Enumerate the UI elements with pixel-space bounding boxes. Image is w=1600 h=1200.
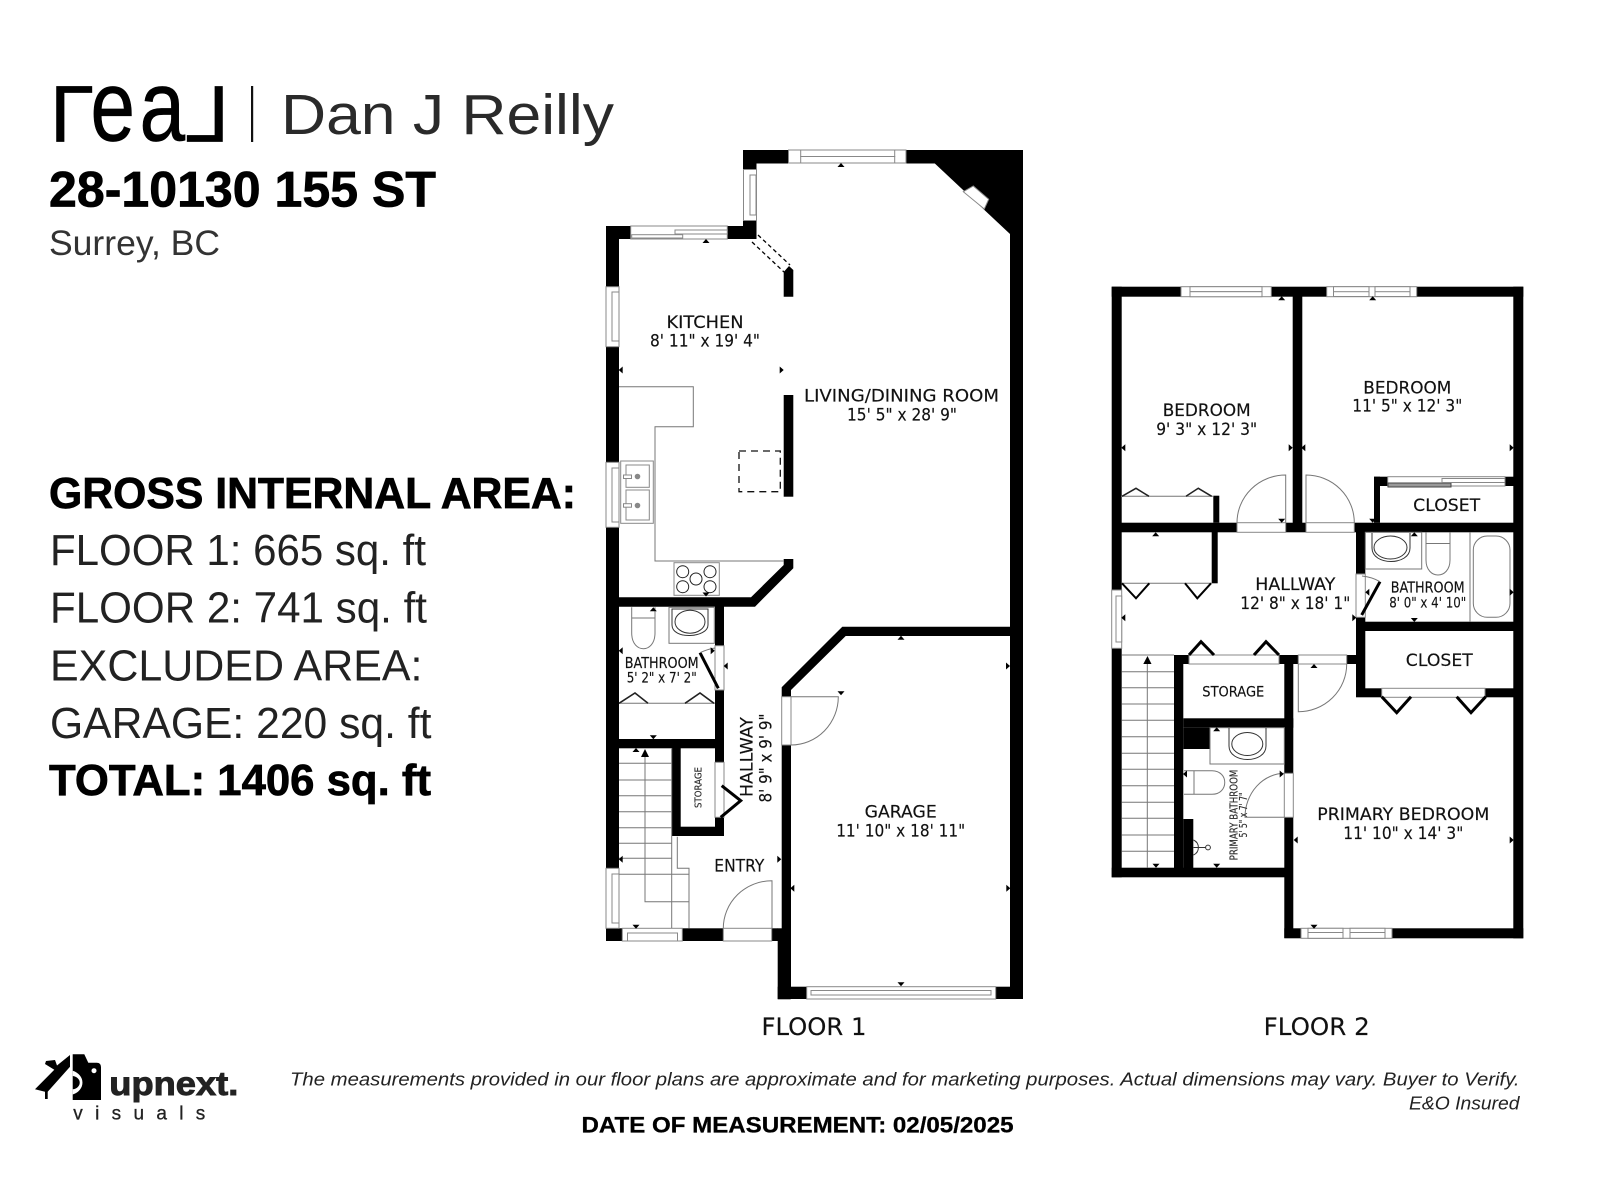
logo: real wordmark: Γ [50,70,94,159]
label: primary bathroom: PRIMARY BATHROOM [1228,770,1240,860]
street address: 28-10130 155 ST [49,162,436,218]
floor 2 measurement markers [1121,296,1514,929]
floor plan: floor 2 [1112,287,1523,1041]
logo: upnext visuals [35,1054,238,1124]
dims: bathroom: 5' 2" x 7' 2" [627,670,697,686]
wordmark: visuals: visuals [73,1103,205,1124]
dims: hallway: 8' 9" x 9' 9" [756,714,776,802]
city: Surrey, BC [49,224,220,263]
dims: second bedroom: 11' 5" x 12' 3" [1352,397,1462,417]
fireplace [963,186,989,209]
floor 2 room labels [1156,378,1489,860]
hall bathroom fixtures [1365,532,1510,622]
floor 1 windows and openings [606,150,996,999]
floor 2 walls [1112,287,1523,938]
floor plan: floor 1 [606,150,1023,1041]
logo: real wordmark: L [184,70,229,159]
kitchen glazed opening [752,235,790,272]
logo: real wordmark: a [140,51,185,162]
excluded area: EXCLUDED AREA: [50,642,422,690]
floor 1 walls [606,150,1023,999]
stove [674,563,719,595]
area summary [49,469,576,805]
dims: bathroom: 8' 0" x 4' 10" [1389,595,1466,611]
agent name: Dan J Reilly [281,83,615,147]
logo: real wordmark [50,51,229,163]
icon: house and camera mark [35,1054,101,1100]
separator [251,86,253,142]
disclaimer line: The measurements provided in our floor plans are approximate and for marketing purposes. Actual dimensions may vary. Buyer to Verify. [290,1070,1520,1090]
stairs [1122,655,1174,868]
wordmark: upnext.: upnext. [109,1065,238,1102]
label: lower closet: CLOSET [1406,651,1473,671]
kitchen counter [619,387,784,561]
label: bathroom: BATHROOM [625,654,699,672]
label: bathroom: BATHROOM [1391,579,1465,597]
stairs [619,748,689,928]
garage area: GARAGE: 220 sq. ft [50,699,432,748]
label: bedroom: BEDROOM [1163,401,1251,421]
dims: kitchen: 8' 11" x 19' 4" [650,332,760,352]
property address [49,162,436,263]
label: living/dining room: LIVING/DINING ROOM [804,387,999,407]
dims: primary bedroom: 11' 10" x 14' 3" [1343,824,1463,844]
dims: bedroom: 9' 3" x 12' 3" [1156,420,1257,440]
logo: real wordmark: e [90,51,135,163]
dims: primary bathroom: 5' 5" x 7' 7" [1238,792,1250,838]
label: storage: STORAGE [1202,685,1264,701]
floor 1 room labels [625,313,999,877]
primary bathroom fixtures [1184,728,1284,855]
kitchen island dashed outline [739,451,780,492]
label: hallway: HALLWAY [1255,575,1336,595]
label: garage: GARAGE [865,803,937,823]
caption: floor 2: FLOOR 2 [1264,1013,1370,1041]
floor 2 windows and openings [1112,287,1505,938]
caption: floor 1: FLOOR 1 [762,1013,866,1041]
label: upper closet: CLOSET [1413,496,1481,516]
floor 2 closets [1121,488,1486,713]
total area: TOTAL: 1406 sq. ft [49,756,431,805]
insurance note: E&O Insured [1409,1094,1521,1114]
brand header: real | Dan J Reilly [50,51,615,163]
floor 2 doors [1237,475,1380,817]
date of measurement: DATE OF MEASUREMENT: 02/05/2025 [582,1112,1014,1138]
label: hallway: HALLWAY [738,716,758,797]
label: entry: ENTRY [714,857,765,877]
area heading: GROSS INTERNAL AREA: [49,469,576,518]
bathroom fixtures [619,607,718,703]
dims: garage: 11' 10" x 18' 11" [836,822,965,842]
dims: hallway: 12' 8" x 18' 1" [1240,594,1350,614]
label: kitchen: KITCHEN [666,313,744,333]
label: second bedroom: BEDROOM [1363,378,1451,398]
floor 1 doors [721,697,838,928]
floor 1 measurement markers [619,163,1010,986]
label: primary bedroom: PRIMARY BEDROOM [1317,805,1489,825]
label: storage: STORAGE [694,767,704,808]
footer disclaimer [290,1070,1521,1138]
kitchen sink [621,461,653,523]
dims: living/dining room: 15' 5" x 28' 9" [847,406,957,426]
floor 2 area: FLOOR 2: 741 sq. ft [50,584,427,632]
floor 1 area: FLOOR 1: 665 sq. ft [50,526,426,575]
